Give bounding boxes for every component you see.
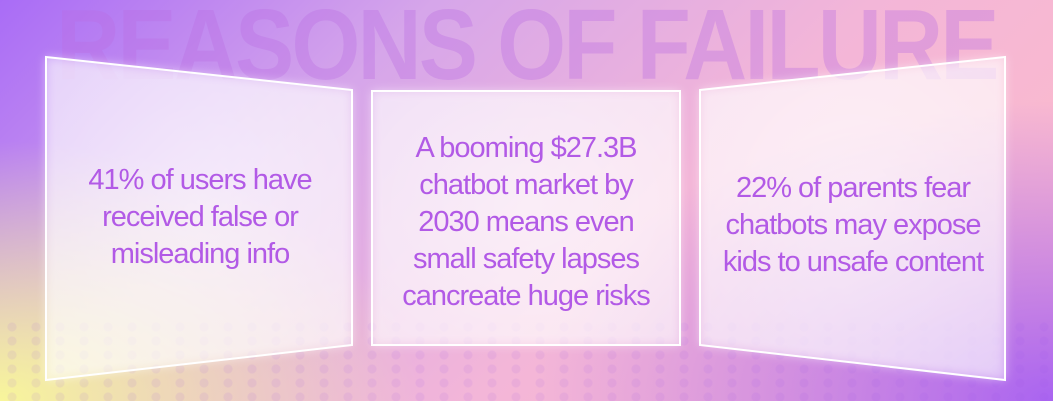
panel: center bbox=[372, 91, 680, 345]
text: right panel: 22% of parents fear bbox=[736, 172, 970, 204]
text: left panel: 41% of users have bbox=[88, 164, 312, 196]
text: right panel: kids to unsafe content bbox=[723, 246, 983, 278]
text: center panel: 2030 means even bbox=[418, 206, 634, 238]
panel: left bbox=[46, 57, 352, 380]
text: center panel bbox=[402, 132, 650, 312]
text: center panel: A booming $27.3B bbox=[415, 132, 636, 164]
text: left panel: received false or bbox=[102, 201, 298, 233]
text: left panel bbox=[88, 164, 312, 270]
text: right panel bbox=[723, 172, 984, 278]
text: center panel: cancreate huge risks bbox=[402, 280, 650, 312]
text: center panel: chatbot market by bbox=[419, 169, 633, 201]
text: right panel: chatbots may expose bbox=[725, 209, 981, 241]
panel: right bbox=[700, 57, 1005, 380]
text: left panel: misleading info bbox=[111, 238, 289, 270]
text: center panel: small safety lapses bbox=[413, 243, 639, 275]
